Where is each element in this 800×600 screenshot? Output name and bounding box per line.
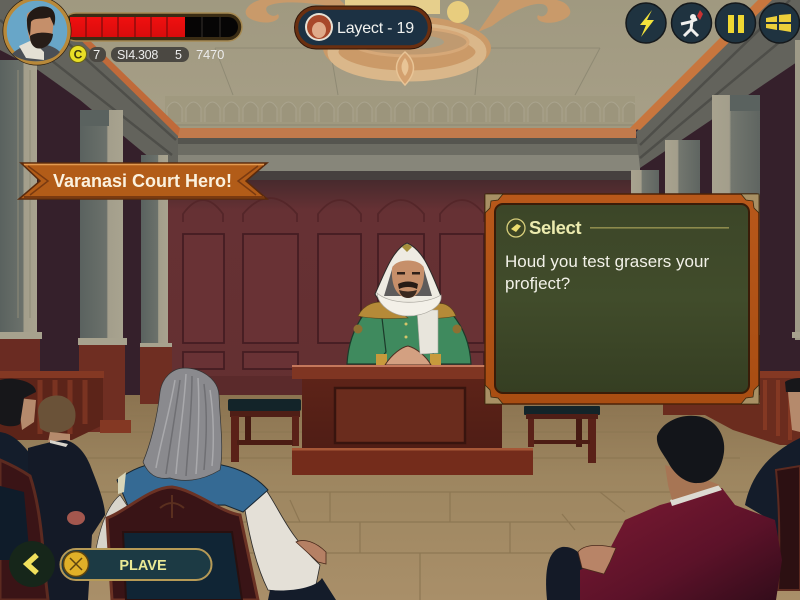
gold epaulettes (358, 302, 408, 319)
side stools (228, 399, 600, 463)
right jury bench (663, 371, 800, 445)
button: pause (716, 3, 756, 43)
left pillars (0, 60, 172, 432)
ceiling (40, 0, 770, 130)
boy (38, 396, 76, 433)
green uniform (347, 314, 471, 364)
entablature (170, 138, 640, 144)
floor (0, 395, 800, 600)
select heading: Select (529, 217, 581, 238)
back button (9, 541, 55, 587)
coin icon (64, 552, 88, 576)
button: power (626, 3, 666, 43)
hero avatar (2, 0, 72, 66)
ceiling chandelier ornament (246, 0, 570, 85)
man at far left (0, 432, 50, 530)
select icon (507, 219, 525, 237)
wall skirting (168, 376, 638, 395)
currency stats (70, 46, 224, 62)
scarf wrap (377, 293, 441, 316)
currency stats: 7 (93, 47, 100, 62)
white scarf (417, 310, 438, 354)
back wall (168, 180, 638, 395)
floor tile lines (0, 416, 800, 600)
white shirt sleeves (95, 495, 130, 562)
right ceiling beam (636, 0, 800, 168)
question text: profject? (505, 274, 570, 293)
coin: C (74, 48, 83, 62)
currency stats: 5 (175, 48, 182, 62)
gray hair (143, 368, 222, 480)
face (392, 260, 424, 298)
top right buttons (626, 3, 800, 43)
title banner (19, 163, 267, 199)
man in maroon jacket (546, 547, 590, 600)
seated man hand (67, 511, 85, 525)
chair back (107, 487, 258, 600)
blue vest (117, 464, 268, 512)
corner ornaments (485, 194, 759, 404)
play label: PLAVE (119, 558, 167, 574)
foreground audience right (546, 378, 800, 600)
head covering (375, 243, 441, 312)
coin (70, 46, 86, 62)
left ceiling beam (0, 0, 178, 166)
button: windows (760, 3, 800, 43)
play button (60, 549, 212, 580)
button: runner (672, 3, 712, 43)
level badge (294, 6, 432, 49)
gray-haired spectator (95, 368, 336, 600)
ceiling seams (215, 48, 600, 95)
question panel (485, 194, 759, 404)
level label: Layect - 19 (337, 20, 414, 37)
wall panels (183, 198, 484, 369)
level avatar (305, 13, 333, 41)
head covering shadow (384, 266, 432, 296)
cuffs and hands (376, 354, 387, 365)
heading rule (590, 227, 729, 229)
title banner: Varanasi Court Hero! (53, 171, 232, 191)
currency stats: SI4.308 (117, 48, 158, 62)
health bar (62, 13, 242, 41)
right pillars (631, 40, 800, 340)
left jury bench (0, 371, 131, 440)
question text: Houd you test grasers your (505, 252, 709, 271)
player status (2, 0, 242, 66)
foreground audience left (0, 379, 105, 600)
man at far right (745, 438, 800, 560)
ornamental frieze (165, 96, 635, 128)
judge at the bench (347, 243, 471, 365)
judge bench (292, 365, 533, 475)
orange cornice strip (178, 128, 636, 138)
left chair (0, 460, 48, 600)
currency stats: 7470 (196, 47, 224, 62)
